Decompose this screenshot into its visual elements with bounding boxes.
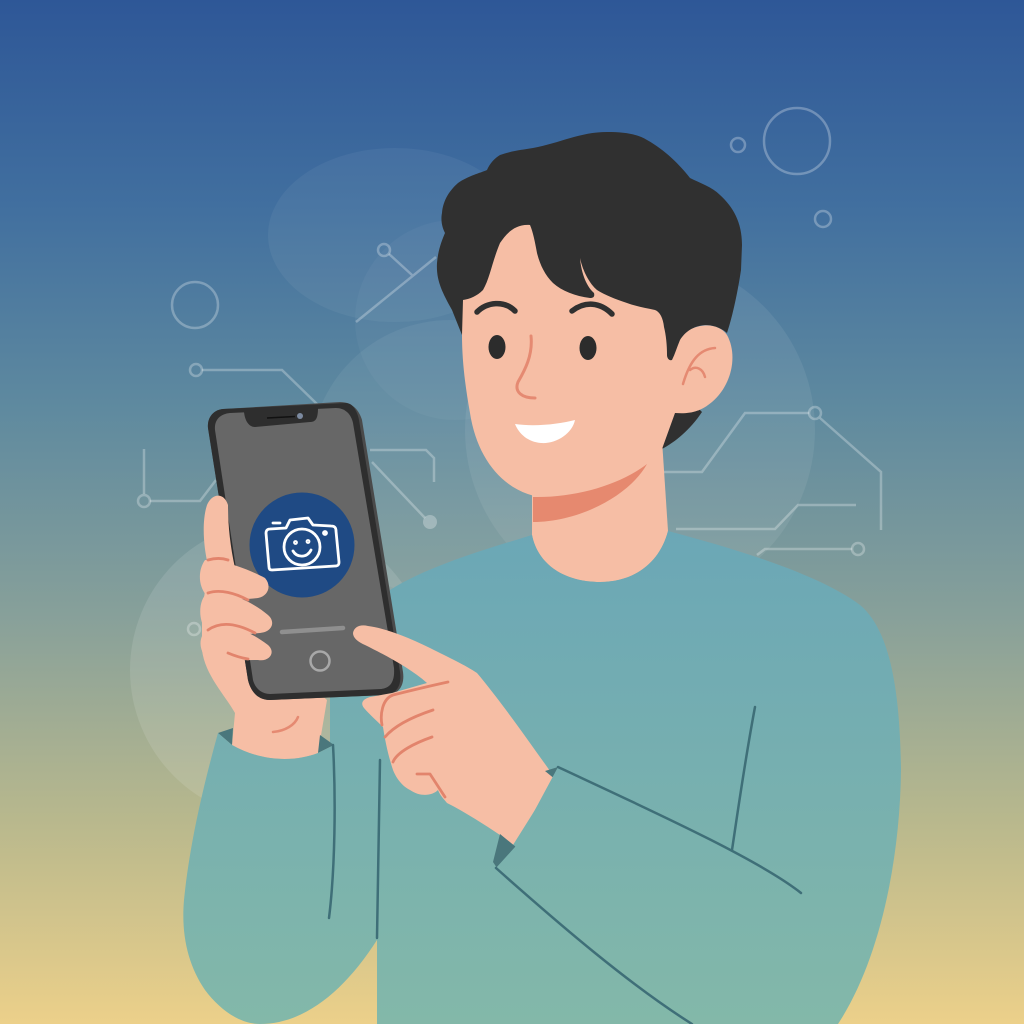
phone bezel bbox=[208, 403, 400, 700]
face bbox=[462, 200, 675, 498]
finger 3 bbox=[201, 626, 272, 660]
sweater left sleeve bbox=[183, 733, 380, 1024]
sweater right sleeve bbox=[496, 767, 830, 1024]
eyes bbox=[488, 335, 596, 360]
pointing hand bbox=[353, 625, 555, 845]
smile bbox=[515, 420, 575, 443]
phone speaker bbox=[267, 416, 295, 418]
holding hand fingers over phone bbox=[200, 496, 272, 660]
phone home bar bbox=[282, 628, 343, 632]
ear detail bbox=[683, 348, 715, 384]
neck shadow bbox=[533, 464, 647, 522]
ear bbox=[668, 325, 732, 413]
camera dot bbox=[297, 413, 303, 419]
finger 2 bbox=[200, 592, 272, 634]
wrist crease bbox=[273, 717, 298, 732]
phone body edge bbox=[208, 402, 403, 700]
hair bbox=[437, 132, 742, 360]
phone home button bbox=[310, 652, 330, 670]
sweater body bbox=[330, 531, 901, 1024]
sweater fold lines bbox=[329, 707, 801, 1024]
phone bbox=[208, 402, 403, 700]
phone notch bbox=[244, 408, 318, 427]
thumb bbox=[204, 496, 235, 568]
app icon circle bbox=[250, 492, 354, 598]
nose bbox=[517, 336, 535, 398]
eyebrows bbox=[477, 304, 612, 314]
background blobs bbox=[130, 148, 815, 820]
person bbox=[183, 132, 901, 1024]
neck bbox=[532, 440, 668, 582]
finger 1 bbox=[200, 560, 269, 599]
holding hand palm bbox=[202, 560, 327, 759]
sweater cuffs dark inner bbox=[218, 728, 558, 868]
phone screen bbox=[215, 408, 394, 694]
pointing hand lines bbox=[381, 682, 448, 797]
finger lines on holding hand bbox=[208, 558, 255, 659]
hair back behind ear bbox=[655, 400, 702, 449]
icon: smiling camera bbox=[266, 518, 339, 570]
circuit lines and circles bbox=[138, 108, 881, 635]
